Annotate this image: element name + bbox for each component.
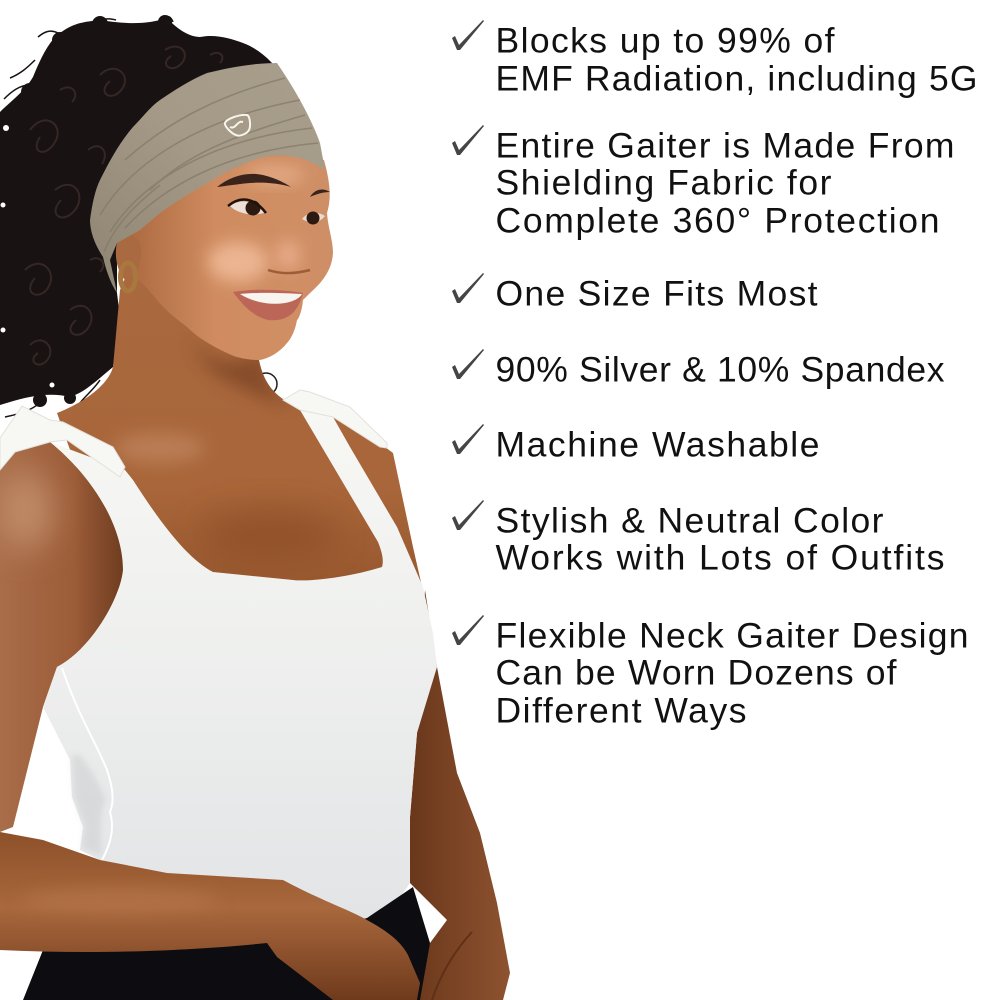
- icon: check mark: [452, 424, 484, 454]
- icon: check mark: [452, 349, 484, 379]
- face: [120, 145, 333, 360]
- feature: flexible design: Flexible Neck Gaiter Design: [496, 616, 968, 656]
- feature: shielding fabric: Entire Gaiter is Made From: [496, 126, 954, 166]
- feature: flexible design: [452, 615, 968, 730]
- hair: [0, 15, 283, 417]
- feature: material: 90% Silver & 10% Spandex: [496, 350, 945, 390]
- headband gaiter: [90, 63, 325, 293]
- left arm: [0, 442, 123, 832]
- feature: blocks EMF radiation: [452, 20, 978, 98]
- icon: check mark: [452, 125, 484, 155]
- icon: check mark: [452, 20, 484, 50]
- feature: stylish color: [452, 500, 944, 578]
- feature: shielding fabric: Complete 360° Protection: [496, 200, 940, 240]
- icon: check mark: [452, 273, 484, 303]
- feature: shielding fabric: Shielding Fabric for: [496, 162, 832, 202]
- ear: [116, 235, 141, 280]
- neck and chest: [57, 276, 422, 588]
- feature: one size: One Size Fits Most: [496, 274, 818, 314]
- right arm and hand: [410, 590, 510, 1000]
- stray hair curl: [255, 373, 277, 395]
- logo on headband: [225, 115, 250, 136]
- facial features: [217, 174, 330, 320]
- icon: check mark: [452, 615, 484, 645]
- feature: blocks EMF radiation: EMF Radiation, including 5G: [496, 58, 978, 98]
- forearm and hand: [0, 832, 420, 1000]
- icon: check mark: [452, 500, 484, 530]
- feature: machine washable: Machine Washable: [496, 424, 820, 464]
- hoop earring: [120, 263, 136, 291]
- feature: stylish color: Stylish & Neutral Color: [496, 500, 884, 540]
- black pants: [23, 887, 430, 1000]
- feature list: [452, 20, 978, 730]
- feature: flexible design: Different Ways: [496, 690, 746, 730]
- feature: shielding fabric: [452, 125, 954, 240]
- feature: stylish color: Works with Lots of Outfits: [496, 538, 944, 578]
- white tank top: [43, 410, 437, 920]
- shoulder ties: [0, 390, 387, 477]
- feature: blocks EMF radiation: Blocks up to 99% of: [496, 20, 835, 60]
- feature: flexible design: Can be Worn Dozens of: [496, 652, 897, 692]
- photo: woman wearing headband gaiter: [0, 15, 510, 1000]
